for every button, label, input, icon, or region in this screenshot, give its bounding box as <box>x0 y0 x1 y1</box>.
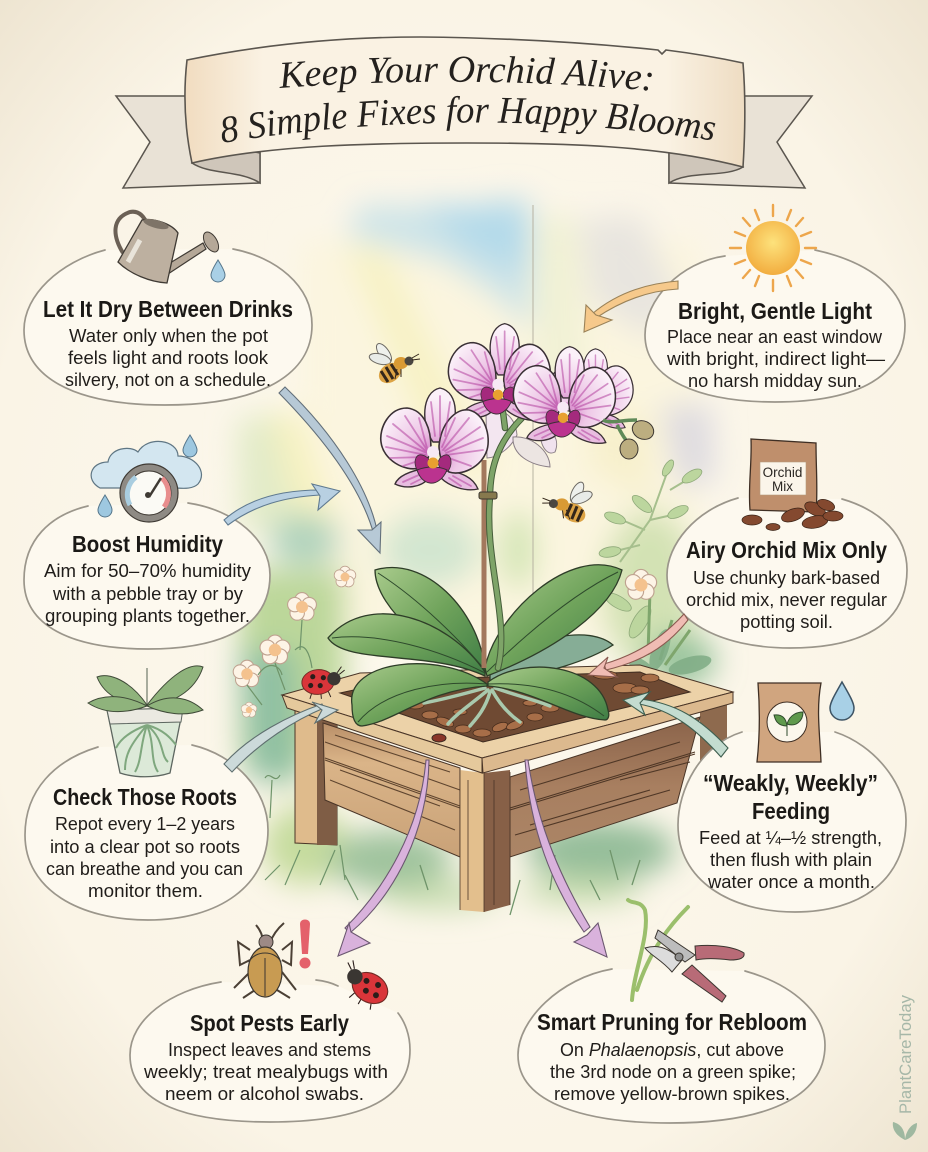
text: orchid mix: Airy Orchid Mix Only <box>686 537 887 563</box>
icon: sun <box>730 205 816 291</box>
icon: beetle <box>234 923 296 998</box>
text: pests: weekly; treat mealybugs with <box>143 1062 388 1082</box>
bubble: bright light <box>645 250 905 402</box>
icon: ladybug pest <box>332 959 394 1014</box>
title text: Keep Your Orchid Alive: <box>280 56 652 92</box>
arrow: roots <box>224 702 338 772</box>
buds <box>603 417 657 459</box>
text: humidity: grouping plants together. <box>45 606 250 626</box>
bubble: orchid mix <box>667 498 907 648</box>
text: bright light: no harsh midday sun. <box>688 371 862 391</box>
text: humidity: Boost Humidity <box>72 531 223 557</box>
text: pruning: remove yellow-brown spikes. <box>554 1084 790 1104</box>
orchid plant <box>328 324 657 726</box>
watermark: PlantCareToday <box>896 995 915 1114</box>
arrow: mix <box>588 614 688 677</box>
text: roots: Check Those Roots <box>53 784 237 810</box>
text: feeding: then flush with plain <box>710 850 872 870</box>
tiny ladybug <box>432 734 446 742</box>
flower spike stem <box>489 412 522 668</box>
arrows <box>224 281 728 957</box>
text: orchid mix <box>686 537 887 632</box>
arrow: light <box>584 281 678 332</box>
icon: humidity gauge and cloud <box>91 435 201 522</box>
text: pruning: the 3rd node on a green spike; <box>550 1062 796 1082</box>
text: pests: neem or alcohol swabs. <box>165 1084 364 1104</box>
text: roots: can breathe and you can <box>46 859 243 879</box>
flowers <box>448 324 550 420</box>
watermark <box>893 995 917 1140</box>
ladybug on planter <box>301 666 347 700</box>
text: let it dry: silvery, not on a schedule. <box>65 370 271 390</box>
bubbles <box>24 249 907 1123</box>
bee upper left <box>368 341 420 387</box>
banner face <box>185 37 745 167</box>
text: bright light: Bright, Gentle Light <box>678 298 872 324</box>
text: let it dry: feels light and roots look <box>68 348 269 368</box>
icon: exclamation mark <box>300 920 310 968</box>
icon: orchid mix bag: Orchid <box>763 465 802 480</box>
icon: watering can <box>115 212 225 283</box>
text: humidity: with a pebble tray or by <box>52 584 243 604</box>
text: orchid mix: potting soil. <box>740 612 833 632</box>
title banner <box>114 36 814 189</box>
text: feeding: “Weakly, Weekly” <box>703 770 878 796</box>
icon: orchid mix bag: Mix <box>772 479 793 494</box>
text: pruning <box>537 1009 807 1104</box>
planter box <box>282 665 733 912</box>
text: feeding: Feed at ¼–½ strength, <box>699 828 882 848</box>
text: feeding: water once a month. <box>707 872 875 892</box>
text: pests: Spot Pests Early <box>190 1010 349 1036</box>
text: bright light: Place near an east window <box>667 327 883 347</box>
text: roots: Repot every 1–2 years <box>55 814 235 834</box>
bubble: pests <box>130 980 410 1122</box>
bubble: humidity <box>24 503 270 649</box>
icon: clear pot with roots <box>88 666 203 777</box>
text: feeding <box>699 770 882 892</box>
icon: fertilizer bag and drop <box>757 682 854 762</box>
bubble: let it dry <box>24 249 312 405</box>
icon: orchid mix bag <box>742 439 843 530</box>
banner tails <box>116 96 812 188</box>
text: roots <box>46 784 243 901</box>
arrow: feeding <box>623 692 728 757</box>
text: pests <box>143 1010 388 1104</box>
bubble: pruning <box>518 969 825 1123</box>
text: feeding: Feeding <box>752 798 830 824</box>
text: humidity: Aim for 50–70% humidity <box>44 561 251 581</box>
text: pruning: On Phalaenopsis, cut above <box>560 1040 784 1060</box>
text: let it dry <box>43 296 293 390</box>
support stake <box>482 460 486 668</box>
text: roots: into a clear pot so roots <box>50 837 240 857</box>
text: let it dry: Water only when the pot <box>69 326 268 346</box>
arrow: pests <box>338 760 429 956</box>
leaves <box>328 565 622 726</box>
rear flowers <box>486 349 633 467</box>
text: orchid mix: Use chunky bark-based <box>693 568 880 588</box>
title text: 8 Simple Fixes for Happy Blooms <box>222 96 716 142</box>
arrow: pruning <box>525 760 607 957</box>
arrow: watering <box>279 387 381 553</box>
text: bright light <box>666 298 885 391</box>
text: orchid mix: orchid mix, never regular <box>686 590 887 610</box>
text: pests: Inspect leaves and stems <box>168 1040 371 1060</box>
text: let it dry: Let It Dry Between Drinks <box>43 296 293 322</box>
arrow: humidity <box>224 484 340 525</box>
icon: pruning shears <box>628 900 744 1002</box>
text: humidity <box>44 531 251 626</box>
text: pruning: Smart Pruning for Rebloom <box>537 1009 807 1035</box>
text: bright light: with bright, indirect light— <box>666 349 885 369</box>
text: roots: monitor them. <box>88 881 203 901</box>
scene: watercolor backdrop <box>233 198 716 915</box>
bubble: feeding <box>678 732 906 912</box>
tie <box>479 492 497 499</box>
title text <box>222 56 716 142</box>
bee lower right <box>540 478 598 531</box>
bubble: roots <box>25 745 268 920</box>
